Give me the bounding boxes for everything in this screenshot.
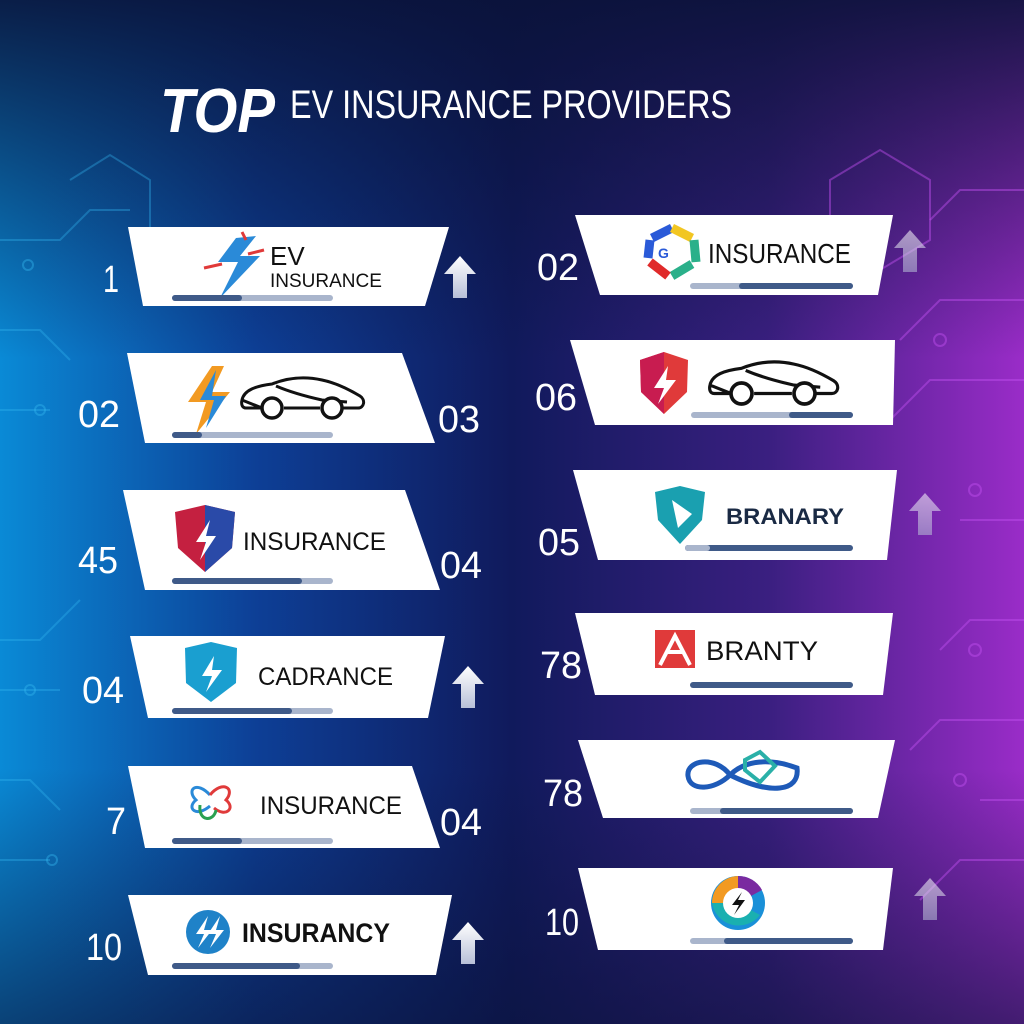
- rank numbers left: 04: [440, 802, 482, 844]
- right card 4: BRANTY: [706, 636, 818, 666]
- rank numbers left: 7: [106, 801, 126, 843]
- icon: lightning: [204, 232, 264, 298]
- left card 5: INSURANCE: [260, 792, 402, 820]
- left card 3: INSURANCE: [243, 528, 386, 556]
- title: EV INSURANCE PROVIDERS: [290, 83, 732, 127]
- title: TOP: [160, 77, 276, 146]
- left card 4: [130, 636, 445, 718]
- left card 1: [128, 227, 449, 306]
- rank numbers left: 1: [103, 259, 119, 301]
- rank numbers left: [78, 259, 482, 969]
- right card 3: BRANARY: [726, 504, 844, 529]
- arrows: [444, 230, 946, 964]
- rank numbers right: 05: [538, 522, 580, 564]
- left card 4: CADRANCE: [258, 663, 393, 691]
- left card 6: [128, 895, 452, 975]
- left card 1: EV: [270, 241, 305, 271]
- right card 3: [573, 470, 897, 560]
- title: [160, 77, 732, 146]
- right card 4: [575, 613, 893, 695]
- right card 1: G: [658, 245, 669, 261]
- right card 1: [575, 215, 893, 295]
- rank numbers right: 06: [535, 377, 577, 419]
- rank numbers right: 78: [540, 645, 582, 687]
- rank numbers left: 04: [440, 545, 482, 587]
- rank numbers left: 10: [86, 927, 122, 969]
- right card 2: [570, 340, 895, 425]
- rank numbers right: 78: [543, 773, 583, 815]
- left card 6: INSURANCY: [242, 918, 390, 948]
- right card 6: [578, 868, 893, 950]
- rank numbers right: 02: [537, 247, 579, 289]
- left card 3: [123, 490, 440, 590]
- rank numbers right: [535, 247, 583, 944]
- left card 5: [128, 766, 440, 848]
- left card 2: [127, 353, 435, 443]
- right card 1: INSURANCE: [708, 238, 851, 269]
- rank numbers left: 02: [78, 394, 120, 436]
- rank numbers left: 04: [82, 670, 124, 712]
- rank numbers left: 45: [78, 540, 118, 582]
- rank numbers left: 03: [438, 399, 480, 441]
- right card 5: [578, 740, 895, 818]
- left card 1: INSURANCE: [270, 271, 382, 292]
- rank numbers right: 10: [545, 902, 579, 944]
